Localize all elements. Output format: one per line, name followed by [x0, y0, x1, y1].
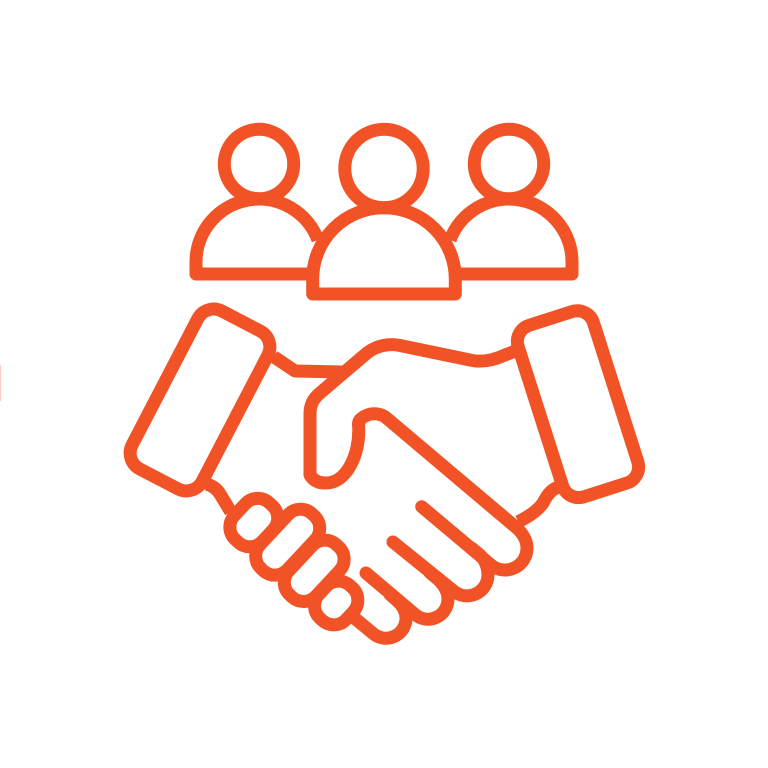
person: center — [313, 129, 455, 294]
third finger — [366, 573, 448, 619]
left arm upper edge — [274, 357, 343, 372]
left cuff — [124, 303, 276, 497]
icon: three people — [196, 129, 572, 294]
fist knuckle 4 — [308, 574, 365, 632]
fourth finger — [352, 594, 406, 638]
right hand with thumb and first finger — [310, 345, 527, 570]
right cuff — [513, 306, 643, 502]
person: left — [196, 129, 318, 274]
icon: handshake — [124, 303, 643, 638]
person: right — [450, 129, 572, 274]
second finger — [393, 542, 488, 596]
left wrist lower edge — [207, 484, 231, 512]
fist knuckle 1 — [223, 491, 285, 554]
fist knuckle 2 — [249, 502, 327, 582]
right wrist lower edge — [518, 487, 558, 522]
fist knuckle 3 — [277, 533, 351, 609]
